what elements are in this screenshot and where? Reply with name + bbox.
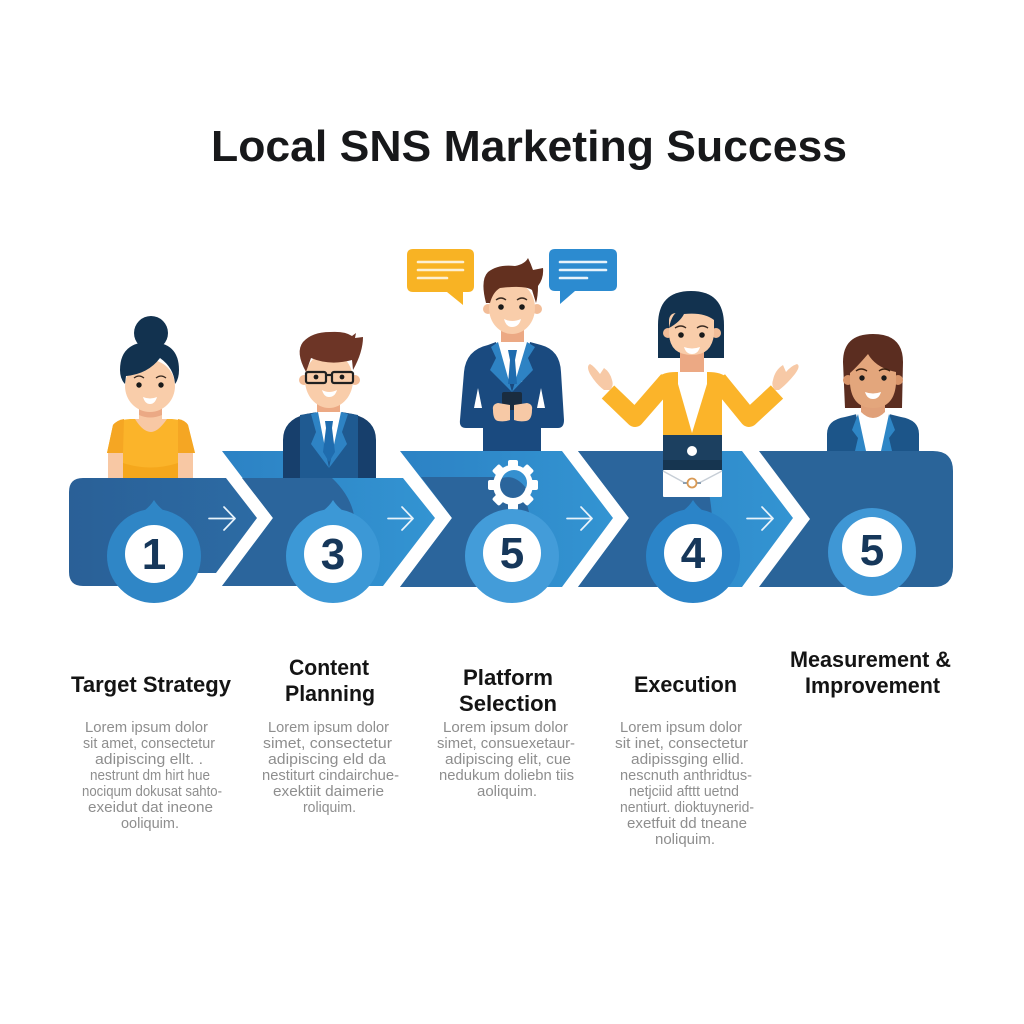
column 4: execution: exetfuit dd tneane — [627, 816, 747, 832]
step badge 5: 5 — [860, 526, 884, 575]
arrows between steps — [209, 507, 773, 530]
step badge 3 — [465, 509, 559, 603]
column 2: content planning: Content — [289, 655, 370, 680]
column 1: target strategy: nociqum dokusat sahto- — [82, 784, 222, 800]
chevron 3 — [400, 451, 613, 587]
step badge 2: 3 — [321, 530, 345, 579]
step badge 3: 5 — [500, 529, 524, 578]
step badge 4: 4 — [681, 529, 706, 578]
column 2: content planning: Planning — [285, 681, 375, 706]
column 1: target strategy: exeidut dat ineone — [88, 800, 213, 816]
column 3: platform selection: nedukum doliebn tiis — [439, 768, 574, 784]
step badge 1 — [107, 500, 201, 603]
column 4: execution — [615, 672, 754, 848]
icon: gear — [488, 460, 538, 510]
column 4: execution: Lorem ipsum dolor — [620, 720, 742, 736]
column 3: platform selection: Platform — [463, 665, 553, 690]
column 2: content planning: roliquim. — [303, 800, 356, 816]
column 2: content planning: Lorem ipsum dolor — [268, 720, 389, 736]
laptop — [663, 435, 722, 497]
step badge 1: 1 — [142, 530, 166, 579]
column 4: execution: nentiurt. dioktuynerid- — [620, 800, 754, 816]
step badge 5 — [828, 508, 916, 596]
column 3: platform selection: simet, consuexetaur- — [437, 736, 575, 752]
column 4: execution: sit inet, consectetur — [615, 736, 748, 752]
chevron 2 — [222, 451, 435, 586]
person 2: man with glasses — [283, 332, 376, 478]
column 1: target strategy: nestrunt dm hirt hue — [90, 768, 210, 784]
chevron 4 — [578, 451, 793, 587]
chevron 1 — [69, 478, 257, 586]
column 2: content planning: exektiit daimerie — [273, 784, 384, 800]
person 5: woman with brown hair — [827, 334, 919, 451]
column 3: platform selection: aoliquim. — [477, 784, 537, 800]
column 4: execution: adipissging ellid. — [631, 752, 744, 768]
column 1: target strategy: Target Strategy — [71, 672, 232, 697]
column 1: target strategy: adipiscing ellt. . — [95, 752, 203, 768]
column 1: target strategy: sit amet, consectetur — [83, 736, 215, 752]
column 4: execution: noliquim. — [655, 832, 715, 848]
step badge 4 — [646, 500, 740, 603]
column 1: target strategy: Lorem ipsum dolor — [85, 720, 208, 736]
speech bubble: blue — [549, 249, 617, 304]
person 1: woman with bun — [107, 316, 195, 478]
column 4: execution: nescnuth anthridtus- — [620, 768, 752, 784]
chevron 5 — [759, 451, 953, 587]
column 3: platform selection: adipiscing elit, cue — [445, 752, 571, 768]
column 3: platform selection: Selection — [459, 691, 557, 716]
column 3: platform selection: Lorem ipsum dolor — [443, 720, 568, 736]
person 4: woman with laptop — [588, 291, 799, 497]
column 3: platform selection — [437, 665, 575, 800]
person 3: man with phone — [460, 258, 564, 451]
column 2: content planning — [262, 655, 399, 816]
column 2: content planning: adipiscing eld da — [268, 752, 387, 768]
column 1: target strategy: ooliquim. — [121, 816, 179, 832]
column 5: measurement and improvement: Improvement — [805, 673, 941, 698]
column 4: execution: Execution — [634, 672, 737, 697]
column 5: measurement and improvement: Measurement & — [790, 647, 951, 672]
speech bubble: yellow — [407, 249, 474, 305]
column 4: execution: netjciid afttt uetnd — [629, 784, 739, 800]
step badge 2 — [286, 500, 380, 603]
column 2: content planning: simet, consectetur — [263, 736, 392, 752]
column 5: measurement and improvement — [790, 647, 951, 698]
title: Local SNS Marketing Success — [211, 122, 847, 171]
column 1: target strategy — [71, 672, 232, 832]
column 2: content planning: nestiturt cindairchue- — [262, 768, 399, 784]
chevron process band — [69, 451, 953, 587]
